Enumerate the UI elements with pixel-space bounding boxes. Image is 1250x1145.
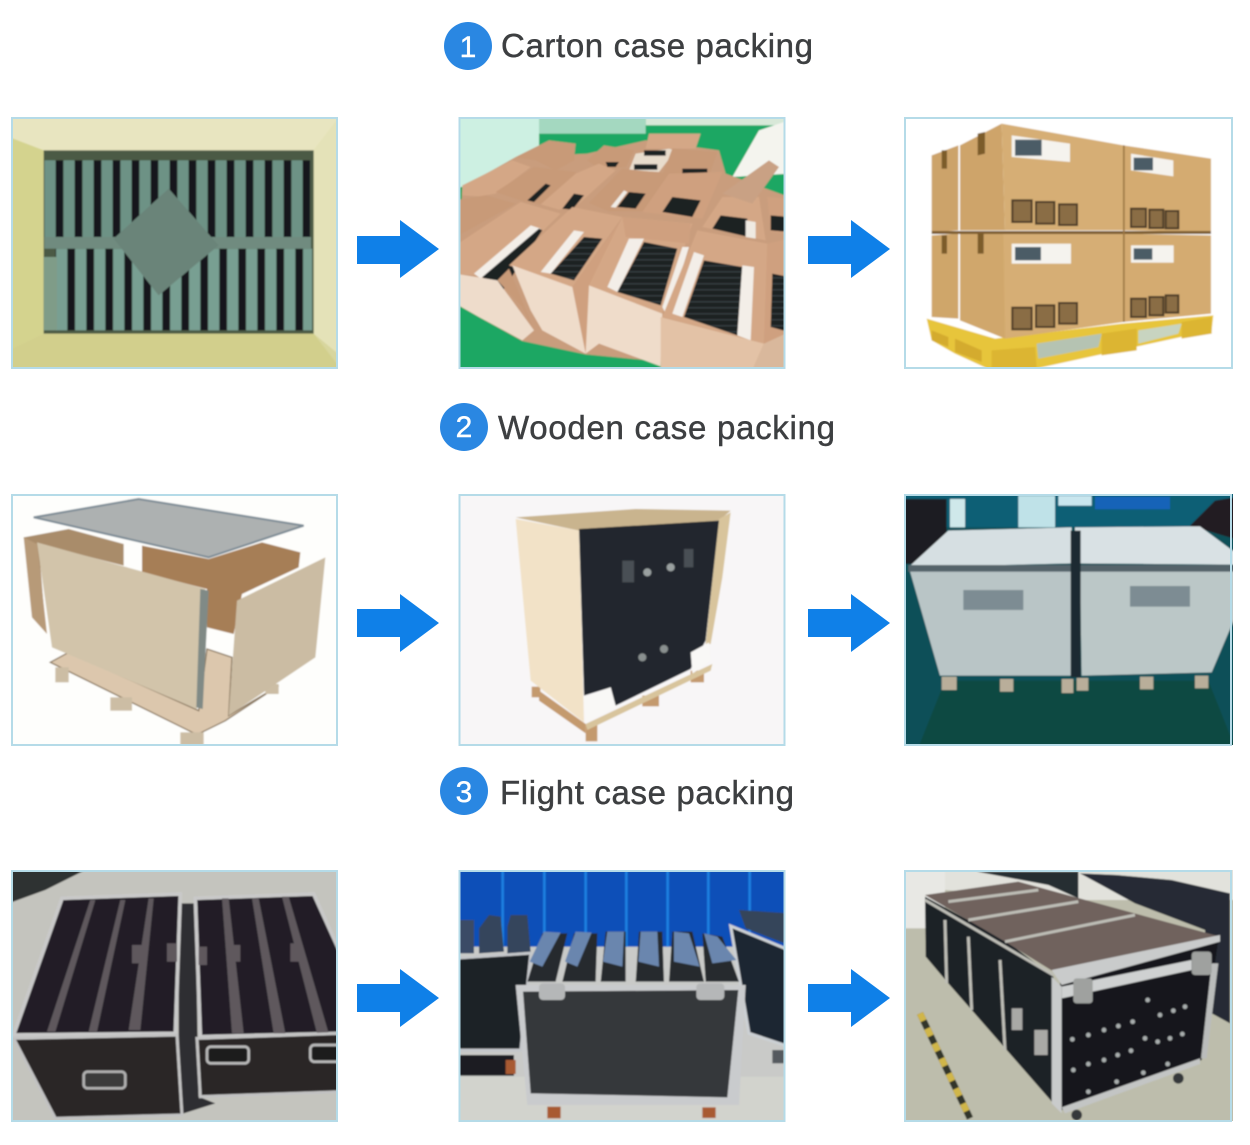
arrow 5 [357,969,439,1027]
pallet base [50,649,279,745]
module tops [530,932,736,967]
right case [195,894,342,1097]
number badge 3 [440,767,488,815]
arrow 6 [808,969,890,1027]
heading: flight case packing [440,767,794,815]
crate top strip [516,509,731,531]
number badge 2 [440,403,488,451]
black LED cabinet [579,521,719,706]
heading text 2: Wooden case packing [498,409,835,446]
front carton 2 [509,207,622,354]
LED modules in case [527,932,739,982]
right wall [229,557,325,716]
crate fronts [910,570,1072,676]
frame [12,118,337,368]
panel: closed flight cases [906,870,1233,1121]
front carton 4 [661,230,789,370]
frame [905,871,1231,1121]
panel: loose modules in carton [13,119,336,367]
white corner protectors [584,642,711,722]
crate stencils [963,586,1190,610]
left back case [456,915,531,1076]
bottom strip [586,664,712,730]
frame [460,118,784,368]
back walls [24,529,300,634]
front carton 3 [586,217,692,366]
lid [34,499,304,557]
frame [905,118,1232,368]
front carton 1 [456,195,561,340]
LED module diamond [114,189,219,295]
carton mass base [456,140,789,370]
crate lids [908,527,1072,567]
back cases [977,872,1230,1023]
middle row cartons [496,160,789,240]
front wall [37,542,205,709]
panel: flight case with modules [460,872,784,1120]
heading text 3: Flight case packing [500,774,794,811]
row of cases [925,882,1220,1103]
number badge 1 [444,22,492,70]
frame [460,871,784,1121]
frame [905,495,1231,745]
handling symbols [1012,200,1178,329]
frame [460,495,784,745]
warehouse background [902,491,1236,564]
gap between cases [179,903,215,1115]
crate right board [706,512,731,644]
panel: closed wooden cases [906,494,1233,745]
wall ribs [501,870,751,947]
shipping labels [1012,135,1174,264]
frame [12,871,337,1121]
arrow 4 [808,594,890,652]
panel: screen in wooden crate [460,496,784,744]
front wall metal edge [196,589,209,709]
number badge 3: 3 [456,776,472,809]
crate left board [516,519,584,722]
panel: open wooden case [22,497,326,744]
stacked cartons [932,124,1211,339]
panel: stacked cartons on pallet [926,122,1214,367]
heading text 1: Carton case packing [501,27,813,64]
heading: carton case packing [444,22,813,70]
yellow floor stripe [920,1013,970,1118]
back row cartons [462,134,717,196]
pallet [532,671,704,741]
arrow 3 [357,594,439,652]
arrow 1 [357,220,439,278]
heading: wooden case packing [440,403,835,451]
panel: open flight cases [13,872,336,1120]
arrow 2 [808,220,890,278]
number badge 2: 2 [456,411,472,444]
front flight case face [1052,935,1220,1120]
frame [12,495,337,745]
panel: cartons with modules [460,119,784,367]
main flight case [506,983,746,1118]
right back case [731,910,789,1063]
left case [14,894,182,1118]
pallet [927,315,1213,370]
pallet feet [942,676,1208,693]
number badge 1: 1 [460,31,476,64]
